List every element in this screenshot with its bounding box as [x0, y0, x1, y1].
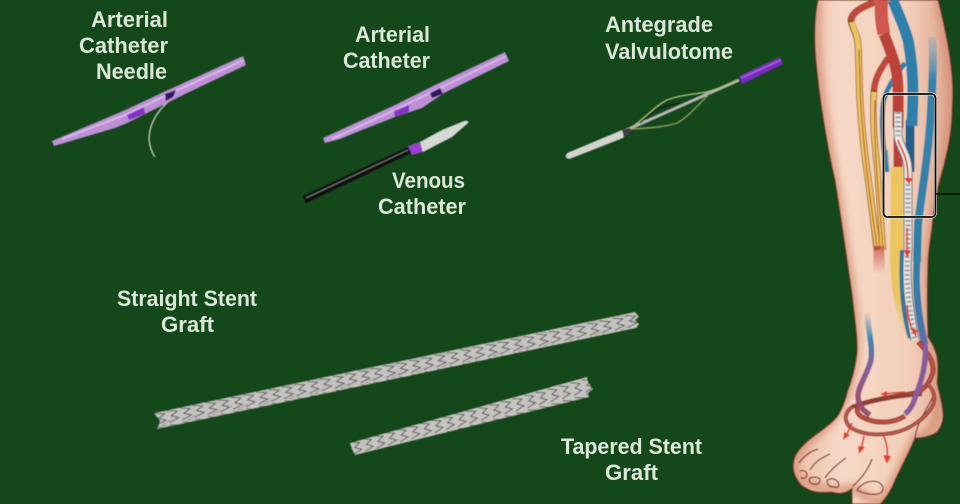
central yellow nerve — [890, 167, 912, 350]
central artery — [881, 0, 898, 168]
foot shading and toes — [799, 397, 933, 494]
label: Antegrade Valvulotome — [605, 12, 733, 64]
label: Straight Stent Graft: Graft — [161, 312, 215, 337]
label: Antegrade Valvulotome: Antegrade — [605, 12, 713, 37]
device: straight stent graft — [154, 312, 639, 429]
label: Arterial Catheter Needle — [79, 7, 168, 84]
skin edge shading — [794, 0, 952, 504]
stent in artery — [898, 112, 915, 340]
leg artwork — [793, 0, 953, 504]
label: Venous Catheter: Catheter — [378, 194, 466, 219]
yellow nerve bundles — [851, 2, 888, 274]
label: Straight Stent Graft: Straight Stent — [117, 286, 258, 311]
label: Arterial Catheter Needle: Needle — [96, 59, 167, 84]
lower blue vein — [916, 215, 925, 345]
foot vessels — [846, 313, 934, 434]
device: arterial catheter — [323, 52, 509, 143]
label: Venous Catheter: Venous — [392, 168, 465, 193]
label: Arterial Catheter Needle: Arterial — [91, 7, 168, 32]
label: Arterial Catheter Needle: Catheter — [79, 33, 168, 58]
label: Venous Catheter — [378, 168, 466, 219]
arrowheads — [843, 178, 917, 464]
label: Tapered Stent Graft — [561, 434, 703, 485]
detail callout box — [884, 94, 936, 217]
device: tapered stent graft — [350, 377, 593, 455]
device: antegrade valvulotome — [566, 57, 783, 159]
label: Straight Stent Graft — [117, 286, 258, 337]
label: Antegrade Valvulotome: Valvulotome — [605, 39, 733, 64]
flow arrows — [846, 140, 914, 460]
label: Tapered Stent Graft: Graft — [605, 460, 659, 485]
callout leader line — [936, 193, 960, 195]
device: arterial catheter needle — [52, 56, 246, 157]
label: Arterial Catheter — [343, 22, 430, 73]
leg and foot outline — [793, 0, 953, 504]
blue veins upper — [882, 0, 933, 262]
label: Tapered Stent Graft: Tapered Stent — [561, 434, 703, 459]
illustration: leg with stented artery — [793, 0, 953, 504]
device: venous catheter — [303, 121, 468, 203]
label: Arterial Catheter: Catheter — [343, 48, 430, 73]
label: Arterial Catheter: Arterial — [355, 22, 430, 47]
